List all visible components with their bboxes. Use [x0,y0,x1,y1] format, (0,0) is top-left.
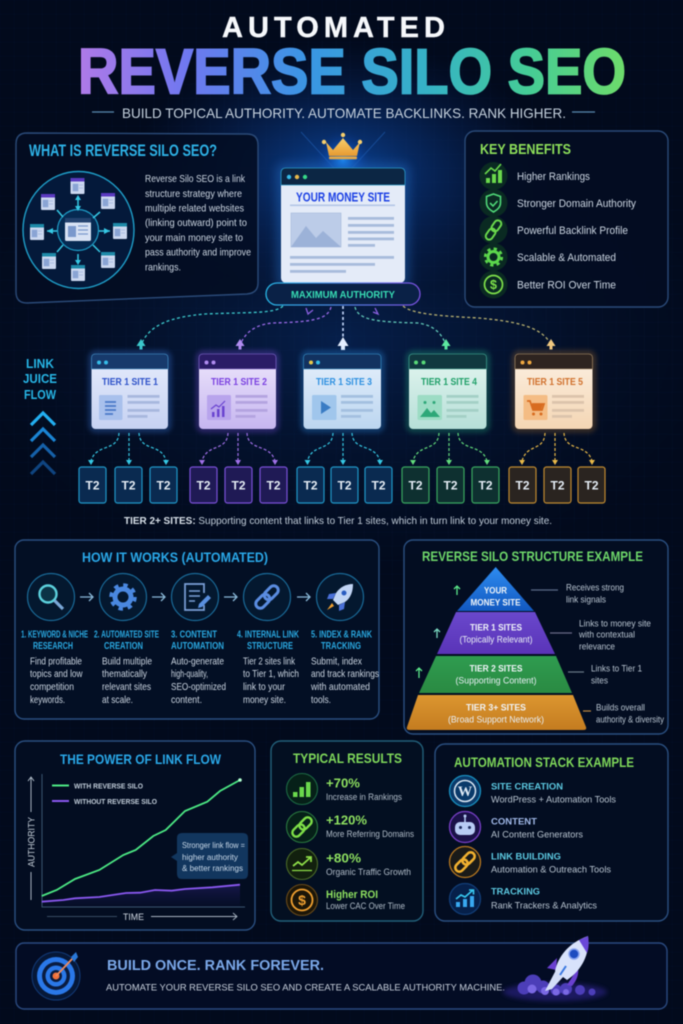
tier 2 boxes: T2 [156,478,171,492]
tier 2 boxes: T2 [266,478,281,492]
up arrows [416,586,460,678]
legend: WITH REVERSE SILO [74,782,143,790]
benefit: domain authority [480,189,636,217]
tier descriptions: with contextual [578,630,635,640]
result: organic traffic [286,848,411,880]
tier descriptions: link signals [566,594,606,606]
tier 2 boxes: T2 [515,478,530,492]
step 2 [94,630,159,706]
panel: how it works [15,540,379,719]
result: rankings: +70% [326,776,360,790]
badge: maximum authority [266,283,420,305]
benefit: domain authority: Stronger Domain Authority [517,198,636,210]
step 4: to Tier 1, which [243,668,299,680]
result: referring domains [286,812,414,842]
tier 2 boxes: T2 [550,478,565,492]
step 1: RESEARCH [33,641,73,652]
description text [145,173,251,274]
tier 2 boxes: T2 [371,478,386,492]
step 3: high-quality, [171,668,208,680]
step 4 [237,630,299,706]
line chart [26,774,248,923]
tier descriptions: Builds overall [596,702,645,714]
arrows: tier 2 to tier 1 [88,433,595,465]
result: higher roi: Higher ROI [326,889,378,901]
description text: (linking outward) point to [145,217,247,229]
tier 2 boxes: T2 [584,478,599,492]
tier 1 site 3 [300,350,385,433]
tier 2 note: TIER 2+ SITES: Supporting content that links to Tier 1 sites, which in turn link to your money site. [124,515,552,527]
stack: link building: Automation & Outreach Tools [491,864,611,876]
subtitle: BUILD TOPICAL AUTHORITY. AUTOMATE BACKLINKS. RANK HIGHER. [122,105,566,121]
tier descriptions: Links to money site [579,618,651,630]
step arrows [80,593,310,601]
tier 1 site 4: TIER 1 SITE 4 [421,376,477,388]
heading: TYPICAL RESULTS [293,750,402,766]
tier 2 boxes: T2 [478,478,493,492]
step 2: at scale. [102,694,133,706]
tier descriptions: authority & diversity [596,714,664,726]
step 4: money site. [243,694,286,706]
tier descriptions: Links to Tier 1 [591,664,642,674]
step 3: 3. CONTENT [171,630,217,640]
step 5: tools. [311,694,331,706]
footer subline: AUTOMATE YOUR REVERSE SILO SEO AND CREATE A SCALABLE AUTHORITY MACHINE. [106,982,505,994]
step 1: keywords. [30,694,65,706]
stack: content: CONTENT [491,816,537,828]
legend: WITHOUT REVERSE SILO [74,797,157,806]
tier 2 boxes: T2 [85,478,100,492]
heading: AUTOMATION STACK EXAMPLE [454,754,634,770]
result: higher roi: Lower CAC Over Time [326,901,405,911]
step 1: competition [30,681,74,693]
callout: Stronger link flow = [182,840,245,850]
step 5 [310,630,379,706]
tier: tier 3+: (Broad Support Network) [448,714,544,724]
result: rankings [286,774,402,804]
description text: structure strategy where [145,188,242,200]
icon: chain link [244,574,290,620]
y axis label: AUTHORITY [26,816,38,867]
tier 1 site 4 [406,350,490,433]
step 3: SEO-optimized [171,681,226,693]
tier 2 boxes: T2 [443,478,458,492]
stack: tracking [450,884,597,914]
step 3: Auto-generate [171,656,224,668]
tier 1 site 3: TIER 1 SITE 3 [316,376,372,388]
benefit: better roi: Better ROI Over Time [517,280,616,292]
stack: site creation: SITE CREATION [491,782,563,792]
icon: search [28,574,74,620]
stack: content [450,812,583,842]
tier: money site: YOUR [484,586,507,596]
step 3 [171,630,226,706]
icon: document and pen [172,574,218,620]
tier 2 boxes [79,467,605,503]
image placeholder [291,213,341,247]
leader lines [531,590,591,711]
benefit: higher rankings [480,162,590,190]
tier: tier 1: (Topically Relevant) [460,634,533,644]
tier descriptions: sites [591,676,608,686]
step 2: 2. AUTOMATED SITE [94,630,159,640]
stack: site creation [450,776,616,806]
title: automated: AUTOMATED [222,12,445,44]
step 4: link to your [243,681,285,693]
tier 1 site 5: TIER 1 SITE 5 [527,376,583,388]
tier descriptions: Receives strong [566,582,624,594]
tier: tier 2: (Supporting Content) [456,676,536,686]
tier 2 boxes: T2 [121,478,136,492]
step 1: Find profitable [30,656,82,668]
description text: multiple related websites [145,202,244,214]
footer headline: BUILD ONCE. RANK FOREVER. [107,958,324,974]
description text: your main money site to [145,232,243,244]
benefit: scalable and automated [480,243,616,271]
step 4: STRUCTURE [247,641,293,652]
step 5: 5. INDEX & RANK [311,630,372,640]
icon: target [32,952,80,1000]
link juice flow: LINK [26,356,55,371]
step 1: topics and low [30,668,83,680]
description text: rankings. [145,262,181,274]
callout [171,833,248,879]
tier 2 boxes: T2 [303,478,318,492]
panel: structure example [404,540,668,734]
link juice flow: JUICE [23,371,57,386]
legend [52,782,157,806]
benefit: backlink profile: Powerful Backlink Profile [517,225,628,237]
arrows: tier 1 to money site [136,306,556,350]
title block [78,12,626,121]
description text: Reverse Silo SEO is a link [145,173,246,185]
x axis label [47,912,237,923]
y axis label [26,777,38,900]
series: with reverse silo [42,780,240,896]
step 5: Submit, index [311,656,363,668]
tier: tier 1 [437,612,555,654]
series: without reverse silo [42,885,240,902]
link juice flow: FLOW [24,387,57,402]
step 3: content. [171,694,202,706]
callout: & better rankings [182,863,243,873]
callout: higher authority [182,852,239,862]
panel: what is reverse silo seo [16,133,258,303]
step 3: AUTOMATION [171,641,224,652]
tier: money site: MONEY SITE [470,598,520,608]
tier: tier 2 [419,656,572,693]
tier 2 boxes: T2 [231,478,246,492]
result: organic traffic: +80% [326,850,361,866]
stack: site creation: W [458,784,473,800]
icon: rocket [316,574,364,620]
tier 2 boxes: T2 [408,478,423,492]
step 4: Tier 2 sites link [243,656,296,668]
step 2: CREATION [104,641,143,652]
benefit: better roi: $ [490,278,497,292]
stack: site creation: WordPress + Automation Tools [491,794,616,806]
pyramid [407,567,586,730]
panel: typical results [271,741,423,921]
step 1: 1. KEYWORD & NICHE [21,630,88,640]
tier 1 site 1: TIER 1 SITE 1 [102,376,158,388]
result: referring domains: More Referring Domains [326,829,414,839]
step 2: relevant sites [102,681,151,693]
icon: gear [100,574,146,620]
result: organic traffic: Organic Traffic Growth [326,867,411,877]
panel: footer banner [16,936,667,1009]
description text: pass authority and improve [145,246,251,258]
panel: automation stack [435,744,668,921]
panel: key benefits [465,131,668,307]
heading: THE POWER OF LINK FLOW [60,751,222,767]
tier descriptions: relevance [579,642,615,652]
money site title: YOUR MONEY SITE [296,190,390,204]
result: rankings: Increase in Rankings [326,792,402,802]
tier descriptions [566,582,664,726]
tier: tier 3+ [407,695,586,730]
step 1 [21,630,88,706]
step 4: 4. INTERNAL LINK [237,630,299,640]
icon: crown [301,130,385,190]
tier 1 site 5 [512,350,596,433]
benefit: scalable and automated: Scalable & Automated [517,252,616,264]
stack: tracking: Rank Trackers & Analytics [491,900,597,912]
result: higher roi [286,884,405,916]
tier: money site [457,567,534,611]
tier: tier 3+: TIER 3+ SITES [466,702,526,714]
badge: maximum authority: MAXIMUM AUTHORITY [291,289,395,301]
stack: tracking: TRACKING [491,886,540,898]
x axis label: TIME [123,912,144,923]
icon: rocket launch [503,936,607,1001]
icon: upward chevrons [31,413,55,474]
tier 2 boxes: T2 [337,478,352,492]
result: higher roi: $ [298,892,306,908]
tier 2 boxes: T2 [196,478,211,492]
step 2: Build multiple [102,656,152,668]
stack: content: AI Content Generators [491,830,583,840]
link juice flow [23,356,57,474]
step 5: with automated [310,681,370,693]
stack: link building [450,846,611,878]
heading: HOW IT WORKS (AUTOMATED) [82,549,268,565]
tier 1 site 2 [196,350,280,433]
tier 1 site 1 [88,350,172,433]
heading: REVERSE SILO STRUCTURE EXAMPLE [422,548,643,564]
step 5: and track rankings [311,668,379,680]
result: referring domains: +120% [326,812,367,828]
diagram: sites pointing to centre [23,172,134,288]
tier: tier 2: TIER 2 SITES [470,664,522,674]
tier: tier 1: TIER 1 SITES [470,622,522,634]
panel: power of link flow [15,741,255,930]
step 2: thematically [102,668,148,680]
tier 1 site 2: TIER 1 SITE 2 [211,376,267,388]
benefit: better roi [480,270,616,298]
heading: KEY BENEFITS [480,141,571,158]
step 5: TRACKING [321,641,361,652]
stack: link building: LINK BUILDING [491,852,561,862]
benefit: backlink profile [480,216,628,244]
benefit: higher rankings: Higher Rankings [517,171,590,183]
heading: WHAT IS REVERSE SILO SEO? [29,142,217,160]
money site window [276,163,410,288]
